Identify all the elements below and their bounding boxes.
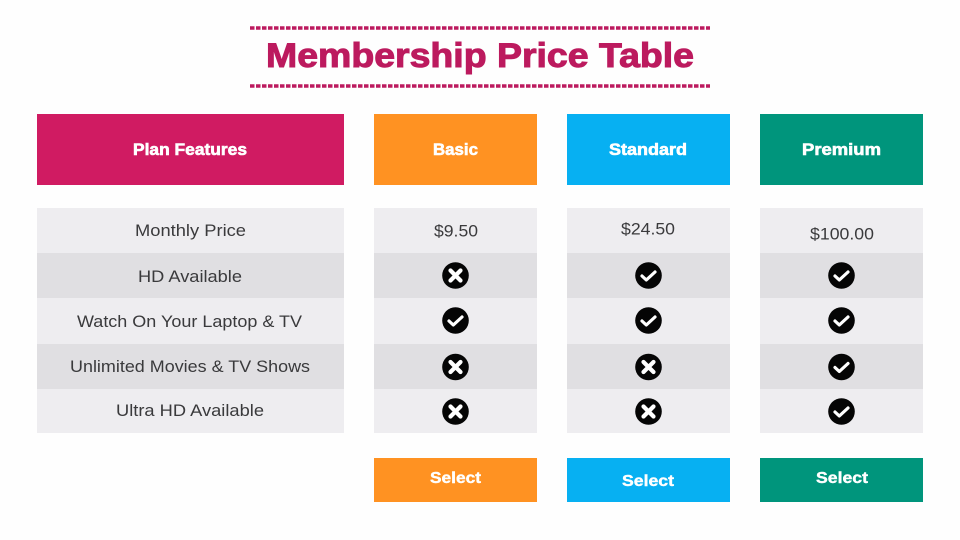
icon: check (828, 398, 855, 425)
icon: cross (442, 262, 469, 289)
header: plan features (37, 114, 344, 185)
icon: check (828, 262, 855, 289)
icon: cross (442, 354, 469, 380)
header: basic (374, 114, 537, 185)
header: premium (760, 114, 923, 185)
panel: standard plan (567, 114, 730, 502)
icon: cross (442, 398, 469, 425)
button: select basic (374, 458, 537, 502)
price: standard: $24.50 (621, 220, 675, 238)
icon: check (828, 307, 855, 334)
panel: premium plan (760, 114, 923, 502)
feature: ultra HD available: Ultra HD Available (116, 402, 264, 420)
icon: check (828, 354, 855, 380)
button: select premium (760, 458, 923, 502)
icon: cross (635, 398, 662, 425)
header: plan features: Plan Features (133, 141, 247, 159)
feature: HD available: HD Available (138, 268, 242, 286)
button: select basic: Select (430, 470, 481, 487)
header: standard (567, 114, 730, 185)
feature: monthly price: Monthly Price (135, 222, 246, 240)
header: basic: Basic (433, 141, 478, 159)
header: standard: Standard (609, 141, 687, 159)
icon: check (442, 307, 469, 334)
price: premium: $100.00 (810, 226, 874, 244)
icon: check (635, 262, 662, 289)
button: select premium: Select (816, 470, 868, 487)
icon: cross (635, 354, 662, 380)
feature: unlimited movies and TV shows: Unlimited Movies & TV Shows (70, 358, 310, 376)
panel: basic plan (374, 114, 537, 502)
feature: watch on laptop and TV: Watch On Your Laptop & TV (77, 313, 302, 331)
panel: plan features column (37, 114, 344, 433)
button: select standard: Select (622, 473, 674, 490)
price: basic: $9.50 (434, 222, 478, 240)
button: select standard (567, 458, 730, 502)
icon: check (635, 307, 662, 334)
title: Membership Price Table (266, 37, 694, 75)
header: premium: Premium (802, 141, 881, 159)
